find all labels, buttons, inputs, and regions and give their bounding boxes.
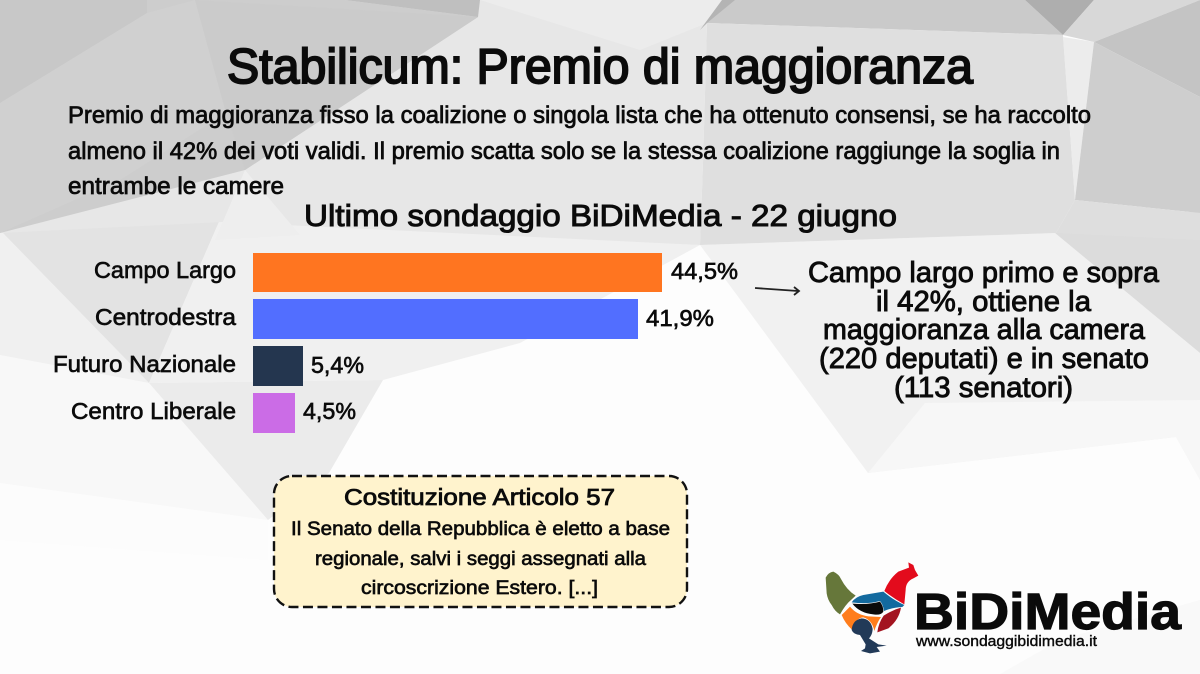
box heading: Costituzione Articolo 57 (344, 484, 615, 510)
wordmark: BiDiMedia (914, 583, 1182, 640)
constitution box (274, 476, 687, 607)
bar: Centro Liberale: 4,5% (303, 398, 356, 424)
result callout text: (220 deputati) e in senato (819, 343, 1149, 375)
bar: Campo Largo: 44,5% (671, 258, 738, 284)
description text block (68, 102, 1091, 200)
result callout text: Campo largo primo e sopra (808, 257, 1160, 289)
result callout text: il 42%, ottiene la (876, 286, 1092, 318)
bar: Campo Largo (94, 253, 738, 292)
bar: Centro Liberale (71, 393, 356, 433)
bar: Futuro Nazionale: 5,4% (311, 352, 364, 378)
arrow (755, 287, 799, 295)
title: Stabilicum: Premio di maggioranza (227, 40, 974, 94)
website url: www.sondaggibidimedia.it (915, 633, 1098, 650)
bar: Futuro Nazionale (53, 346, 364, 386)
bar: Futuro Nazionale: Futuro Nazionale (53, 351, 236, 377)
poll subtitle: Ultimo sondaggio BiDiMedia - 22 giugno (304, 198, 897, 233)
result callout text: (113 senatori) (894, 372, 1073, 404)
description text block: Premio di maggioranza fisso la coalizione o singola lista che ha ottenuto consensi, se ha raccolto (68, 102, 1091, 129)
bar: Campo Largo: Campo Largo (94, 257, 236, 283)
result callout text (808, 257, 1160, 404)
description text block: entrambe le camere (68, 173, 284, 200)
icon: rooster (826, 562, 918, 653)
bar: Centrodestra: Centrodestra (95, 304, 236, 330)
bar chart (53, 253, 738, 433)
box text (291, 518, 670, 599)
bar: Centro Liberale: Centro Liberale (71, 398, 236, 424)
box text: circoscrizione Estero. [...] (361, 577, 598, 599)
bar: Centrodestra: 41,9% (646, 305, 714, 331)
bar: Centrodestra (95, 299, 714, 339)
description text block: almeno il 42% dei voti validi. Il premio scatta solo se la stessa coalizione raggiunge la soglia in (68, 138, 1060, 165)
BiDiMedia logo (826, 562, 1182, 653)
box text: Il Senato della Repubblica è eletto a base (291, 518, 670, 540)
result callout text: maggioranza alla camera (823, 314, 1146, 346)
box text: regionale, salvi i seggi assegnati alla (315, 548, 646, 570)
